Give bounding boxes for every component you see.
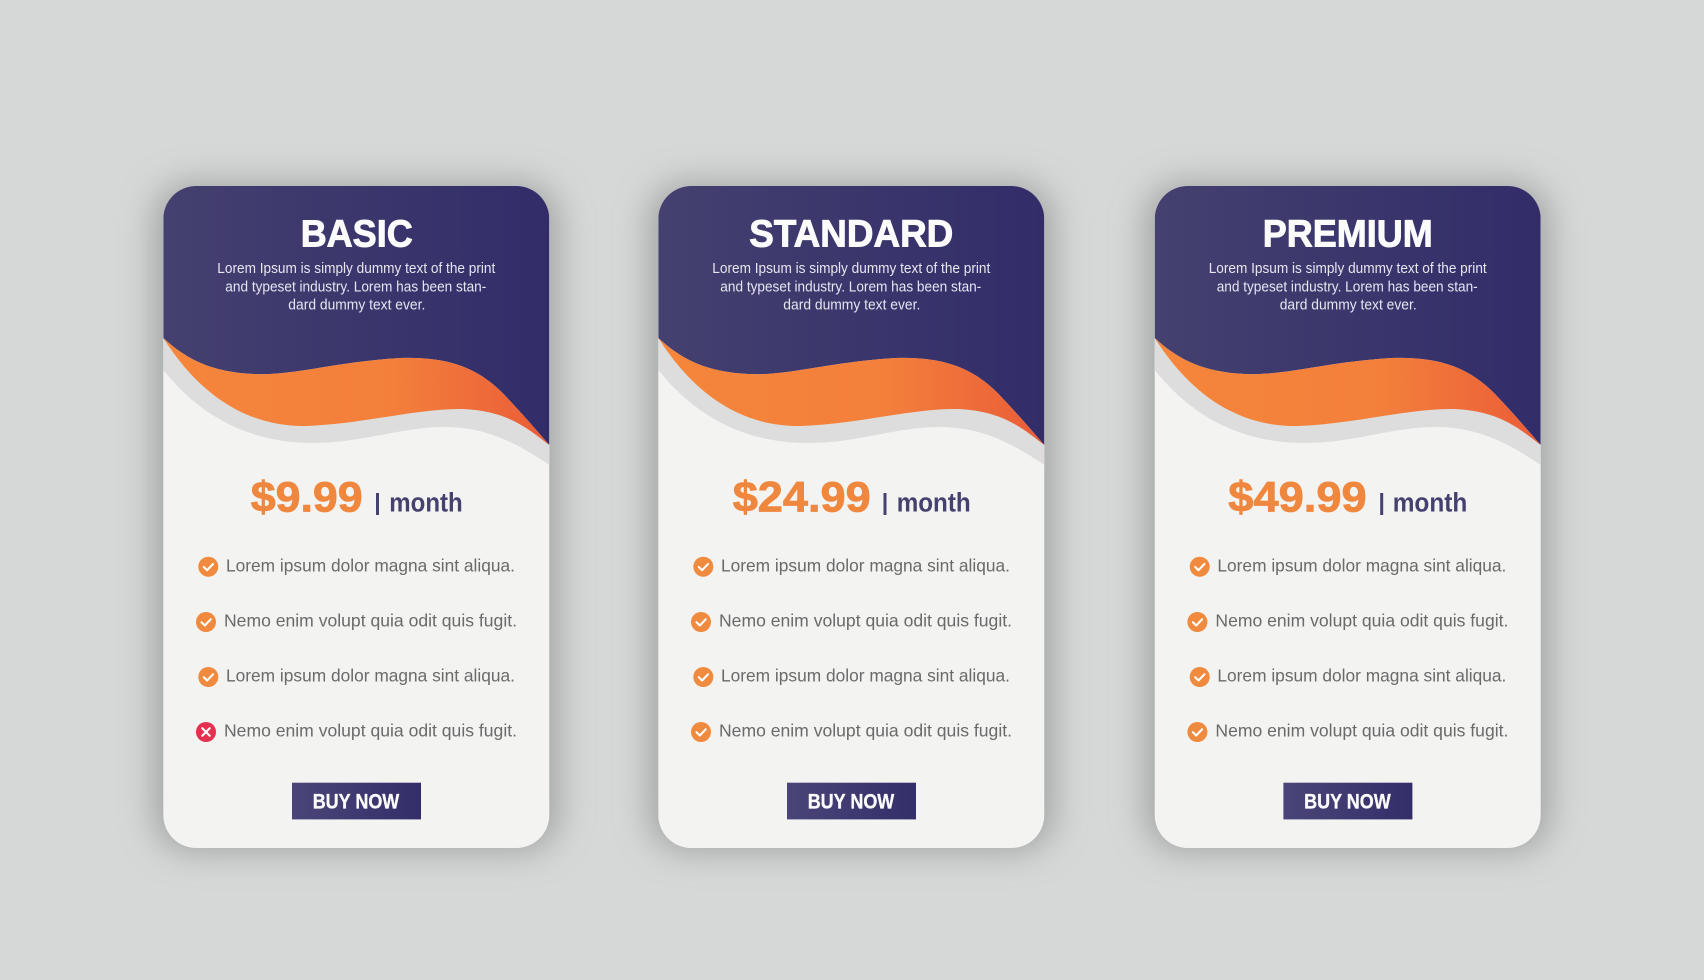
description: Lorem Ipsum is simply dummy text of the print (712, 260, 991, 277)
feature 2: Nemo enim volupt quia odit quis fugit. (224, 611, 517, 631)
feature 1: Lorem ipsum dolor magna sint aliqua. (721, 556, 1010, 576)
title: STANDARD (749, 214, 953, 256)
feature 2: Nemo enim volupt quia odit quis fugit. (1215, 611, 1508, 631)
feature 4 unavailable: Nemo enim volupt quia odit quis fugit. (224, 721, 517, 741)
wave header (163, 186, 549, 465)
description: and typeset industry. Lorem has been stan- (1217, 278, 1478, 296)
feature 3: Lorem ipsum dolor magna sint aliqua. (721, 666, 1010, 686)
description: and typeset industry. Lorem has been stan- (720, 278, 981, 296)
description (1209, 260, 1487, 314)
description (712, 260, 991, 314)
period: month (1393, 488, 1467, 518)
buy button (787, 783, 916, 819)
card body (1155, 186, 1541, 848)
description: dard dummy text ever. (288, 296, 425, 314)
buy button: BUY NOW (313, 790, 399, 813)
panel: standard plan (649, 183, 1053, 851)
price: $49.99 (1228, 474, 1367, 522)
buy button: BUY NOW (1304, 790, 1391, 813)
feature list (196, 556, 517, 742)
feature 1: Lorem ipsum dolor magna sint aliqua. (226, 556, 515, 576)
wave header (658, 186, 1044, 465)
card body (163, 186, 549, 848)
description: and typeset industry. Lorem has been stan- (225, 278, 486, 296)
panel: basic plan (154, 183, 558, 851)
feature 2: Nemo enim volupt quia odit quis fugit. (719, 611, 1012, 631)
price: $24.99 (733, 474, 871, 522)
description (217, 260, 496, 314)
description: Lorem Ipsum is simply dummy text of the print (1209, 260, 1487, 277)
buy button: BUY NOW (808, 790, 894, 813)
wave header (1155, 186, 1541, 465)
feature 4: Nemo enim volupt quia odit quis fugit. (1215, 721, 1508, 741)
description: dard dummy text ever. (1280, 296, 1417, 314)
buy button (1283, 783, 1412, 819)
buy button (292, 783, 421, 819)
feature list (1187, 556, 1508, 742)
feature 3: Lorem ipsum dolor magna sint aliqua. (1217, 666, 1506, 686)
card body (658, 186, 1044, 848)
feature 1: Lorem ipsum dolor magna sint aliqua. (1217, 556, 1506, 576)
title: PREMIUM (1263, 214, 1433, 256)
price: $9.99 (251, 474, 363, 522)
feature list (691, 556, 1012, 742)
panel: premium plan (1146, 183, 1550, 851)
period: month (389, 488, 463, 518)
description: dard dummy text ever. (783, 296, 920, 314)
feature 4: Nemo enim volupt quia odit quis fugit. (719, 721, 1012, 741)
feature 3: Lorem ipsum dolor magna sint aliqua. (226, 666, 515, 686)
period: month (897, 488, 971, 518)
title: BASIC (301, 214, 413, 256)
description: Lorem Ipsum is simply dummy text of the print (217, 260, 496, 277)
